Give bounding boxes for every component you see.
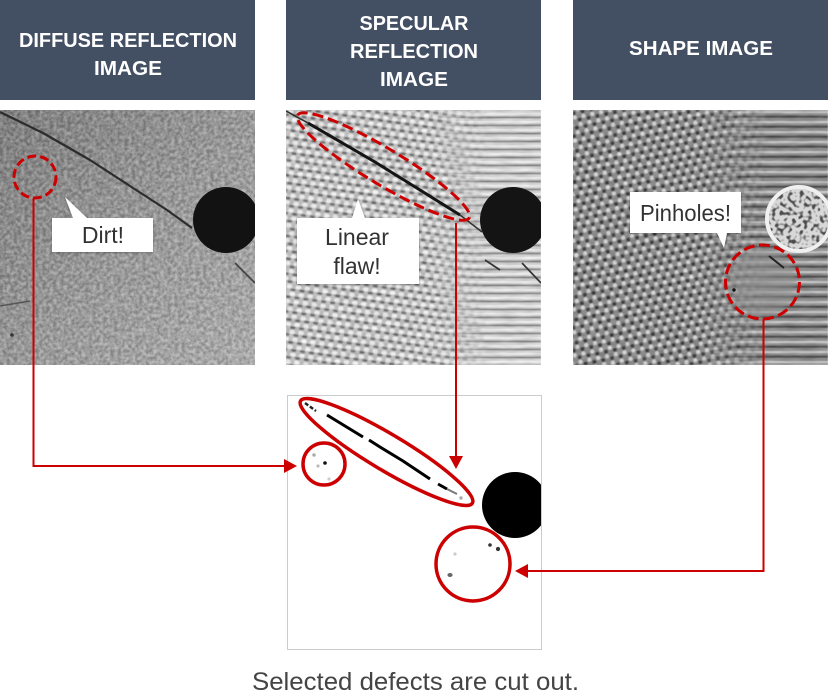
ring: linear flaw	[291, 385, 482, 519]
arrow: pinholes to result	[515, 319, 764, 578]
ring: dirt	[303, 443, 345, 485]
header: shape image: SHAPE IMAGE	[629, 37, 773, 60]
ring: pinholes	[436, 527, 510, 601]
header: specular reflection image: SPECULAR	[360, 12, 469, 35]
linear flaw speck trail	[305, 403, 463, 500]
callout: linear flaw	[297, 199, 419, 284]
header: specular reflection image	[286, 0, 541, 100]
header: diffuse reflection image	[0, 0, 255, 100]
arrow: dirt to result	[34, 198, 297, 473]
highlight: linear flaw dashed ellipse	[289, 100, 478, 233]
callout: linear flaw: Linear	[325, 224, 389, 250]
highlight: pinholes dashed circle	[726, 245, 800, 319]
dirt specks	[312, 453, 331, 481]
panel: specular reflection photo	[286, 110, 546, 365]
highlight: dirt dashed circle	[14, 156, 56, 198]
callout: pinholes	[630, 192, 741, 248]
callout: pinholes: Pinholes!	[640, 200, 731, 226]
panel: diffuse reflection photo	[0, 110, 259, 365]
panel: selected defects result	[288, 385, 548, 650]
black disc	[482, 472, 541, 538]
callout: dirt: Dirt!	[82, 222, 124, 248]
arrow: linear flaw to result	[449, 223, 463, 469]
header: specular reflection image: REFLECTION	[350, 40, 478, 63]
pinhole specks	[447, 543, 500, 577]
callout: dirt	[52, 197, 153, 252]
callout: linear flaw: flaw!	[333, 253, 381, 279]
panel: shape image photo	[573, 110, 828, 365]
header: diffuse reflection image: IMAGE	[94, 57, 162, 80]
header: diffuse reflection image: DIFFUSE REFLECTION	[19, 29, 237, 52]
header: shape image	[573, 0, 828, 100]
header: specular reflection image: IMAGE	[380, 68, 448, 91]
